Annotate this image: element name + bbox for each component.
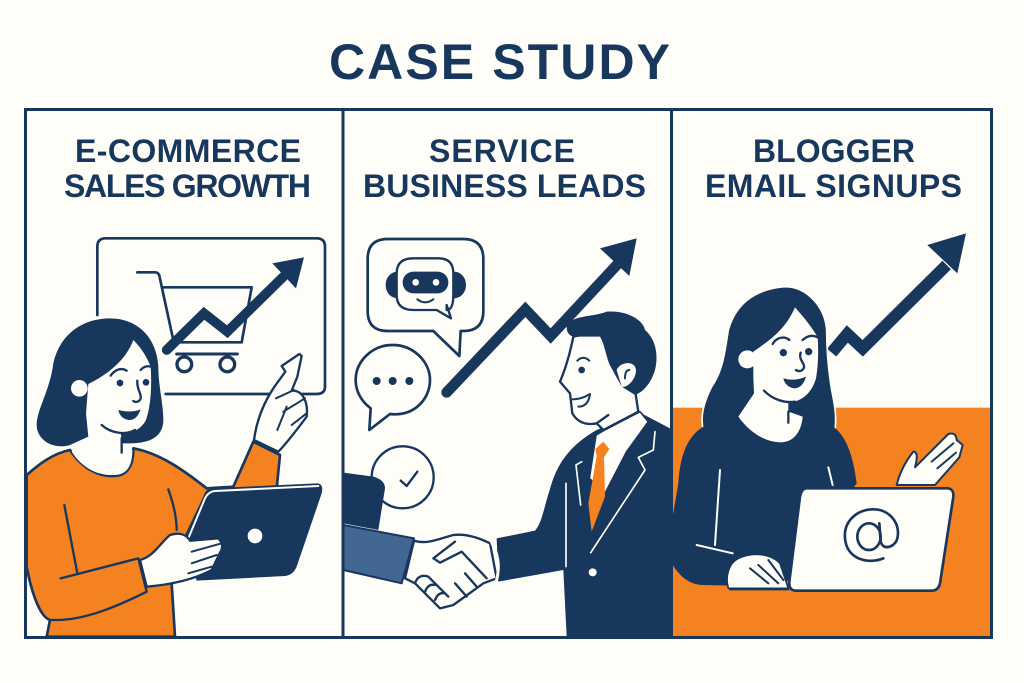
sweater xyxy=(27,442,280,637)
arrow: growth xyxy=(167,257,304,350)
face and neck xyxy=(738,307,818,442)
panel: service business leads xyxy=(343,133,672,637)
blue sleeve xyxy=(343,525,414,583)
dark sleeve block xyxy=(343,473,385,530)
ear xyxy=(71,380,88,397)
illustration: woman with laptop xyxy=(672,233,991,637)
icon: chatbot bubble xyxy=(368,239,483,356)
holding hand xyxy=(140,534,222,587)
handshake xyxy=(405,535,498,608)
hair xyxy=(567,311,657,395)
frame and dividers xyxy=(26,109,992,638)
tie xyxy=(588,442,609,532)
waving hand xyxy=(897,433,963,485)
facial features xyxy=(572,358,608,423)
ear xyxy=(617,363,636,387)
arrow: growth xyxy=(832,233,966,353)
heading: blogger: BLOGGER xyxy=(753,133,915,169)
icon: at sign xyxy=(845,509,898,561)
ear xyxy=(738,350,756,368)
sleeve lines xyxy=(50,489,177,620)
icon: check circle xyxy=(372,446,434,508)
icon: shopping cart xyxy=(137,272,252,372)
panel: e-commerce sales growth xyxy=(27,133,325,637)
illustration: handshake and chatbot xyxy=(343,238,672,637)
heading: e-commerce: SALES GROWTH xyxy=(64,168,311,204)
typing hand xyxy=(727,554,788,588)
title: CASE STUDY xyxy=(329,34,670,90)
heading: service xyxy=(363,133,646,204)
tablet xyxy=(183,483,322,581)
orange backdrop xyxy=(672,408,991,637)
heading: service: SERVICE xyxy=(429,133,575,169)
pointing hand xyxy=(254,354,307,452)
heading: e-commerce xyxy=(64,133,311,204)
illustration: woman with tablet and cart chart xyxy=(27,238,325,637)
screen frame xyxy=(97,238,325,394)
hair xyxy=(37,318,163,446)
hair xyxy=(702,287,836,430)
laptop xyxy=(789,488,953,591)
icon: speech bubble with dots xyxy=(356,345,430,430)
face and neck xyxy=(72,340,151,475)
facial features xyxy=(102,366,151,453)
shirt xyxy=(589,412,648,493)
panel: blogger email signups xyxy=(672,133,991,637)
heading: e-commerce: E-COMMERCE xyxy=(75,133,301,169)
button xyxy=(589,568,597,576)
face xyxy=(560,330,638,430)
sleeve lines xyxy=(697,467,833,553)
heading: service: BUSINESS LEADS xyxy=(363,168,646,204)
heading: blogger xyxy=(705,133,962,204)
suit xyxy=(497,413,672,637)
heading: blogger: EMAIL SIGNUPS xyxy=(705,168,962,204)
facial features xyxy=(764,336,818,423)
lapel lines xyxy=(566,432,655,567)
sweater xyxy=(673,417,857,587)
arrow: growth xyxy=(447,238,637,392)
